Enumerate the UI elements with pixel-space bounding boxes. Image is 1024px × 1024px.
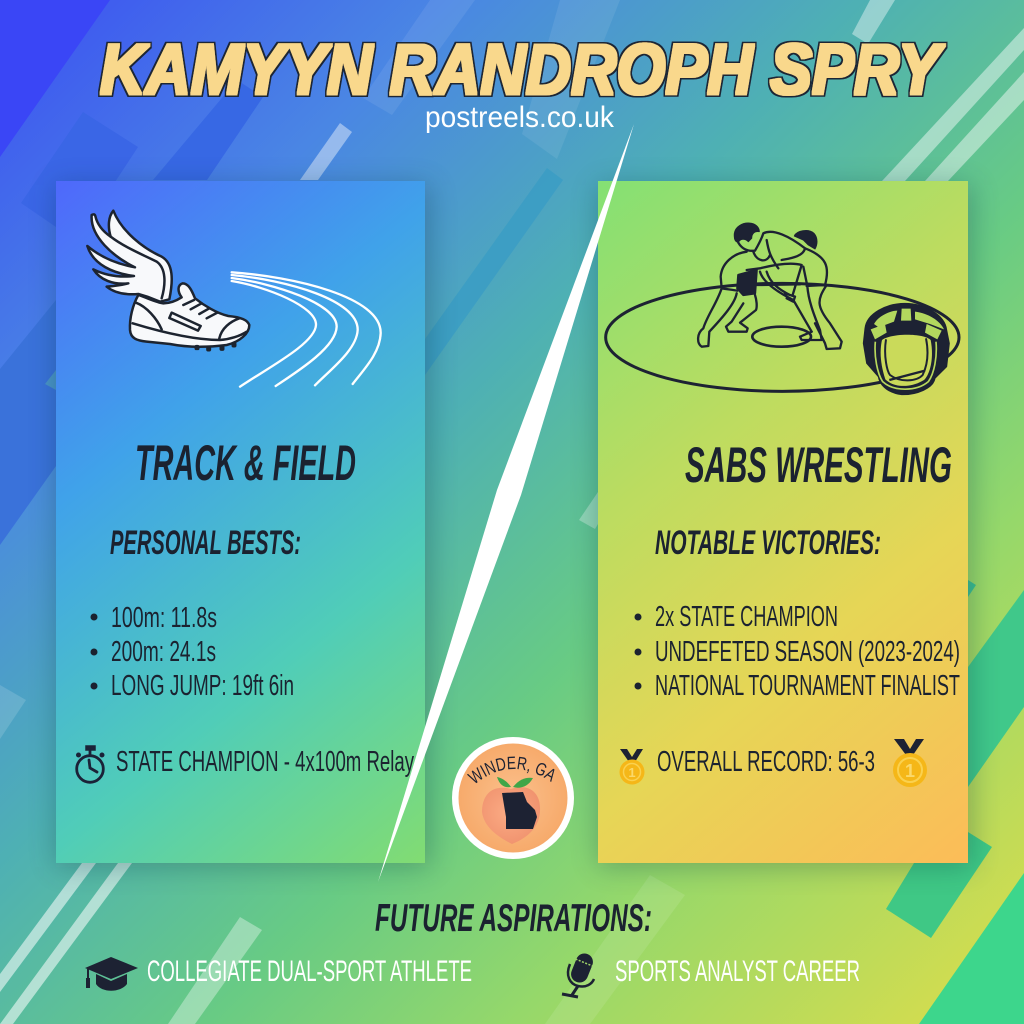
badge: Winder, GA	[452, 737, 574, 859]
subheading: personal bests: PERSONAL BESTS:	[110, 524, 301, 562]
list: personal bests: 100m: 11.8s	[111, 602, 217, 634]
callout: state champion relay: STATE CHAMPION - 4x100m Relay	[116, 746, 414, 778]
heading: track and field: TRACK & FIELD	[135, 435, 356, 491]
icon: wrestling headgear	[863, 303, 949, 395]
icon: winged running shoe	[87, 211, 249, 351]
label: sports analyst: SPORTS ANALYST CAREER	[615, 955, 860, 988]
icon: wrestling mat and wrestlers	[606, 223, 959, 391]
panel: wrestling	[598, 181, 968, 863]
website label: postreels.co.uk	[425, 101, 615, 134]
list: notable victories: 2x STATE CHAMPION	[655, 601, 838, 633]
list: personal bests: 200m: 24.1s	[111, 636, 216, 668]
icon: small gold medal: 1	[628, 765, 636, 780]
icon: large gold medal	[893, 739, 927, 787]
icon: leaves	[497, 777, 533, 788]
icon: microphone	[562, 951, 596, 997]
curved label	[474, 769, 555, 785]
list: personal bests	[90, 602, 294, 702]
icon: small gold medal	[620, 749, 644, 784]
icon: running track lanes	[232, 272, 381, 387]
title: KAMYYN RANDROPH SPRY	[100, 31, 945, 110]
heading: future aspirations: FUTURE ASPIRATIONS:	[375, 897, 652, 940]
icon: Georgia silhouette	[502, 792, 537, 829]
icon: peach	[482, 787, 540, 844]
subheading: notable victories: NOTABLE VICTORIES:	[655, 524, 881, 562]
icon: stopwatch	[76, 746, 104, 782]
badge: Winder, GA: WINDER, GA	[467, 756, 554, 784]
icon: graduation cap	[85, 957, 138, 991]
diagonal white divider	[378, 124, 634, 882]
label: collegiate athlete: COLLEGIATE DUAL-SPORT ATHLETE	[147, 955, 472, 988]
callout: overall record: OVERALL RECORD: 56-3	[657, 746, 875, 778]
list: personal bests: LONG JUMP: 19ft 6in	[111, 670, 294, 702]
panel: track and field	[56, 181, 425, 863]
panel shadows	[56, 185, 972, 867]
icon: large gold medal: 1	[905, 761, 915, 781]
list: notable victories	[634, 601, 960, 702]
